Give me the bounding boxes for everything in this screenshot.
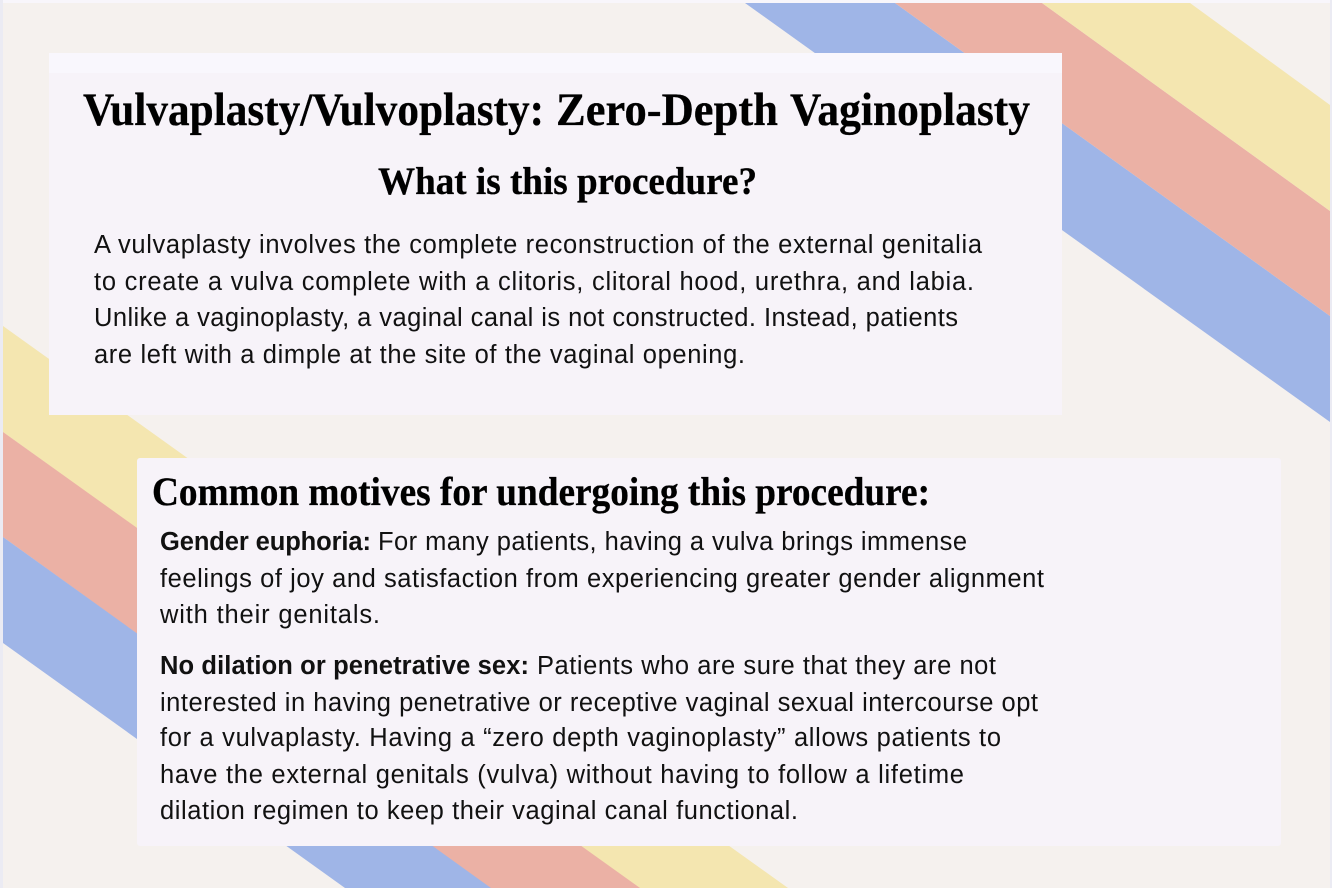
panel: common motives [137, 458, 1281, 846]
procedure description text: are left with a dimple at the site of the vaginal opening. [94, 341, 745, 369]
motive: no dilation or penetrative sex: for a vulvaplasty. Having a “zero depth vaginoplasty” allows patients to [160, 724, 1001, 752]
panel background [49, 53, 1062, 415]
motive: gender euphoria: with their genitals. [159, 601, 380, 629]
procedure description text: A vulvaplasty involves the complete reconstruction of the external genitalia [94, 231, 983, 259]
heading: common motives: Common motives for undergoing this procedure: [152, 469, 930, 514]
motive: no dilation or penetrative sex: No dilation or penetrative sex: [160, 652, 529, 680]
motive: no dilation or penetrative sex: interested in having penetrative or receptive vaginal sexual intercourse opt [160, 689, 1038, 717]
diagonal stripes: top right [745, 3, 1330, 422]
panel background [137, 458, 1281, 846]
diagonal stripes: bottom left [3, 326, 788, 888]
heading: what is this procedure: What is this procedure? [378, 160, 757, 203]
procedure description text [94, 231, 983, 369]
panel: what is this procedure [49, 53, 1062, 415]
title: Vaginoplasty [790, 84, 1030, 136]
motive: gender euphoria: For many patients, having a vulva brings immense [378, 528, 967, 556]
motive: no dilation or penetrative sex: have the external genitals (vulva) without having to follow a lifetime [160, 761, 964, 789]
motive: no dilation or penetrative sex: dilation regimen to keep their vaginal canal functional. [160, 797, 798, 825]
title: Vulvaplasty/Vulvoplasty: [83, 84, 544, 136]
motive: no dilation or penetrative sex [160, 652, 1038, 825]
panel top strip [49, 53, 1062, 73]
title [83, 84, 1030, 136]
motive: gender euphoria: feelings of joy and satisfaction from experiencing greater gender alignment [160, 565, 1044, 593]
procedure description text: to create a vulva complete with a clitoris, clitoral hood, urethra, and labia. [94, 268, 974, 296]
motive: gender euphoria [159, 528, 1044, 629]
motive: no dilation or penetrative sex: Patients who are sure that they are not [537, 652, 996, 680]
title: Zero-Depth [556, 84, 778, 136]
procedure description text: Unlike a vaginoplasty, a vaginal canal is not constructed. Instead, patients [94, 304, 958, 332]
motive: gender euphoria: Gender euphoria: [160, 528, 371, 556]
